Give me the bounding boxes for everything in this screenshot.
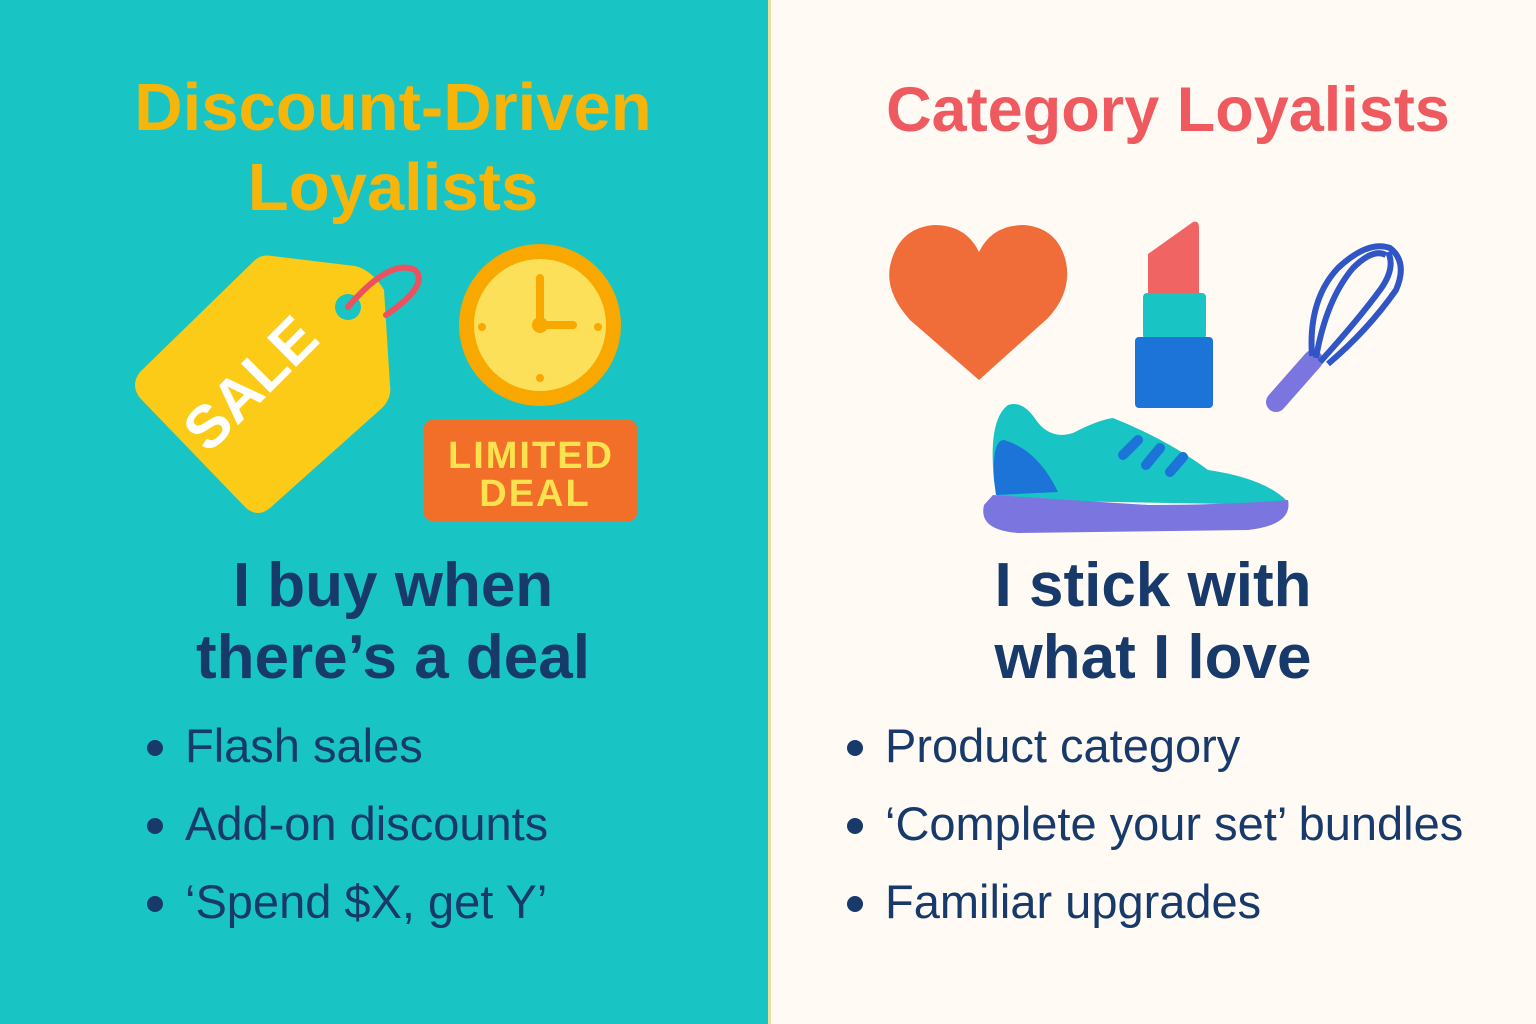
bullets right — [847, 719, 1463, 928]
bullets left: Add-on discounts — [185, 797, 548, 850]
icon: sale tag — [135, 256, 419, 513]
panel: discount-driven — [0, 0, 768, 1024]
bullets left: Flash sales — [185, 719, 423, 772]
icons right — [889, 222, 1404, 533]
icon: shoe — [983, 404, 1288, 533]
icon: sale tag: SALE — [170, 303, 331, 464]
panel: category loyalists — [768, 0, 1536, 1024]
heading: I stick with what I love: what I love — [995, 623, 1311, 692]
heading: I stick with what I love: I stick with — [995, 551, 1311, 620]
title: discount-driven: Loyalists — [248, 150, 538, 225]
icons left — [135, 244, 637, 521]
title: discount-driven — [134, 70, 652, 225]
badge: limited deal — [424, 420, 637, 521]
icon: whisk — [1276, 246, 1401, 402]
icon: heart — [889, 225, 1067, 380]
heading: I buy when there's a deal — [196, 551, 590, 692]
bullets right: ‘Complete your set’ bundles — [885, 797, 1463, 850]
icon: lipstick — [1135, 222, 1213, 408]
title: category loyalists: Category Loyalists — [886, 75, 1450, 145]
title: discount-driven: Discount-Driven — [134, 70, 652, 145]
badge: limited deal: LIMITED — [448, 435, 614, 477]
bullets right: Product category — [885, 719, 1240, 772]
heading: I buy when there's a deal: there’s a deal — [196, 623, 590, 692]
bullets right: Familiar upgrades — [885, 875, 1261, 928]
heading: I buy when there's a deal: I buy when — [233, 551, 553, 620]
badge: limited deal: DEAL — [479, 473, 591, 515]
bullets left — [147, 719, 548, 928]
bullets left: ‘Spend $X, get Y’ — [185, 875, 547, 928]
icon: clock — [459, 244, 621, 406]
heading: I stick with what I love — [994, 551, 1311, 692]
